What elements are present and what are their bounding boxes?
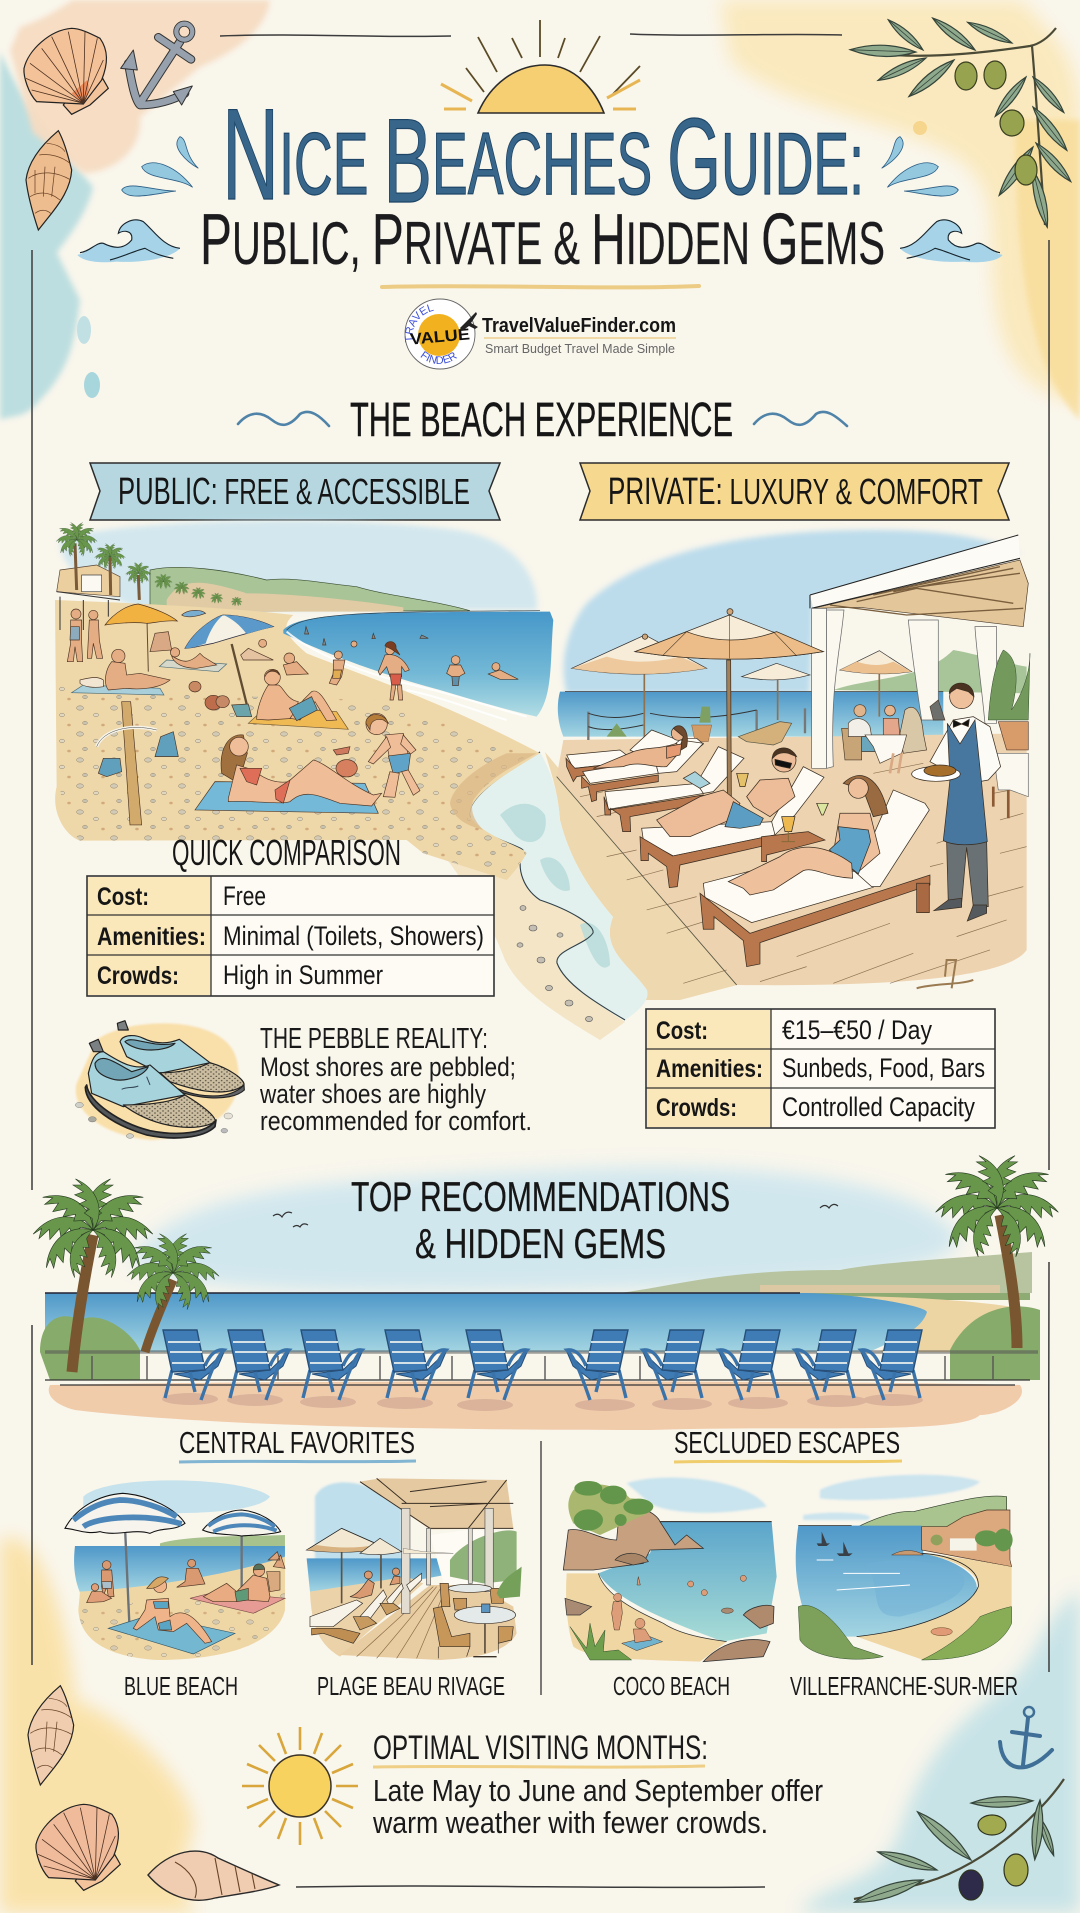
icon: olive branch bottom right	[853, 1779, 1064, 1908]
text: optimal visiting months: OPTIMAL VISITING MONTHS:	[373, 1729, 708, 1767]
table: public comparison: Minimal (Toilets, Showers)	[223, 921, 484, 951]
banner: private	[580, 463, 1009, 520]
heading: top recommendations: & HIDDEN GEMS	[415, 1220, 666, 1267]
labels: beach names: PLAGE BEAU RIVAGE	[317, 1671, 505, 1701]
icon: scallop shell top left	[24, 28, 108, 114]
logo: TravelValueFinder	[404, 298, 676, 370]
table: public comparison: Free	[223, 881, 266, 911]
table: public comparison: Amenities:	[97, 923, 206, 951]
heading: central favorites: CENTRAL FAVORITES	[179, 1425, 415, 1460]
icon: conch shell bottom left	[28, 1686, 74, 1785]
heading: top recommendations	[351, 1173, 730, 1267]
icon: olive branch top right	[850, 15, 1074, 228]
illustration: shoreline foam	[440, 752, 737, 1040]
text: the pebble reality: water shoes are highly	[259, 1079, 486, 1109]
heading: quick comparison: QUICK COMPARISON	[172, 832, 401, 873]
icon: anchor bottom right	[1000, 1707, 1052, 1767]
text: optimal visiting months: Late May to June and September offer	[373, 1773, 823, 1808]
title: ICE	[279, 114, 383, 213]
title: G	[667, 96, 721, 223]
table: public comparison: Cost:	[97, 883, 149, 911]
illustration: villefranche-sur-mer	[796, 1475, 1013, 1660]
text: optimal visiting months	[372, 1729, 823, 1840]
icon: scallop shell bottom left	[36, 1804, 120, 1890]
table: public comparison: Crowds:	[97, 962, 179, 990]
logo: TravelValueFinder: VALUE	[409, 326, 471, 349]
banner: public: PUBLIC: FREE & ACCESSIBLE	[118, 471, 470, 513]
icon: spiral shell bottom	[148, 1851, 279, 1900]
logo: TravelValueFinder: TRAVEL	[404, 304, 434, 342]
icon: sun rising	[441, 20, 640, 113]
heading: top recommendations: TOP RECOMMENDATIONS	[351, 1173, 730, 1220]
title: UIDE:	[721, 114, 864, 213]
logo: TravelValueFinder: Smart Budget Travel Made Simple	[485, 341, 675, 356]
table: public comparison: High in Summer	[223, 960, 383, 990]
table: private comparison: Cost:	[656, 1017, 708, 1045]
text: the pebble reality: recommended for comfort.	[260, 1106, 532, 1136]
heading: the beach experience: THE BEACH EXPERIENCE	[350, 394, 733, 447]
illustration: private beach club	[557, 530, 1030, 988]
illustration: blue beach	[65, 1480, 285, 1660]
subtitle: PUBLIC, PRIVATE & HIDDEN GEMS	[200, 200, 885, 280]
illustration: public beach	[55, 521, 553, 880]
illustration: promenade panorama	[33, 1152, 1059, 1430]
icon: water splashes and wave left	[77, 137, 198, 262]
icon: water shoes	[75, 1021, 244, 1140]
table: private comparison: Sunbeds, Food, Bars	[782, 1053, 985, 1083]
labels: beach names: COCO BEACH	[613, 1671, 730, 1701]
labels: beach names: BLUE BEACH	[124, 1671, 238, 1701]
banner: public	[90, 463, 500, 520]
table: private comparison: €15–€50 / Day	[782, 1015, 932, 1045]
text: the pebble reality	[259, 1023, 532, 1136]
table: private comparison: Controlled Capacity	[782, 1092, 975, 1122]
labels: beach names	[124, 1671, 1018, 1701]
icon: sun	[242, 1727, 358, 1845]
table: private comparison: Crowds:	[656, 1094, 737, 1122]
title: N	[222, 81, 279, 227]
text: the pebble reality: Most shores are pebbled;	[260, 1052, 516, 1082]
heading: secluded escapes: SECLUDED ESCAPES	[674, 1425, 900, 1460]
table: private comparison: Amenities:	[656, 1055, 763, 1083]
illustration: coco beach	[563, 1477, 777, 1662]
text: optimal visiting months: warm weather with fewer crowds.	[372, 1805, 768, 1840]
icon: anchor top left	[121, 24, 192, 105]
table: private comparison	[646, 1009, 995, 1128]
icon: conch shell top left	[26, 131, 72, 230]
illustration: plage beau rivage	[307, 1478, 522, 1660]
title: B	[383, 94, 432, 228]
title: EACHES	[432, 114, 667, 213]
logo: TravelValueFinder: FINDER	[420, 351, 458, 364]
logo: TravelValueFinder: TravelValueFinder.com	[482, 315, 676, 337]
icon: water splashes and wave right	[882, 137, 1003, 262]
decorative gold underline	[382, 286, 699, 287]
table: public comparison	[87, 876, 494, 996]
text: the pebble reality: THE PEBBLE REALITY:	[260, 1023, 488, 1055]
